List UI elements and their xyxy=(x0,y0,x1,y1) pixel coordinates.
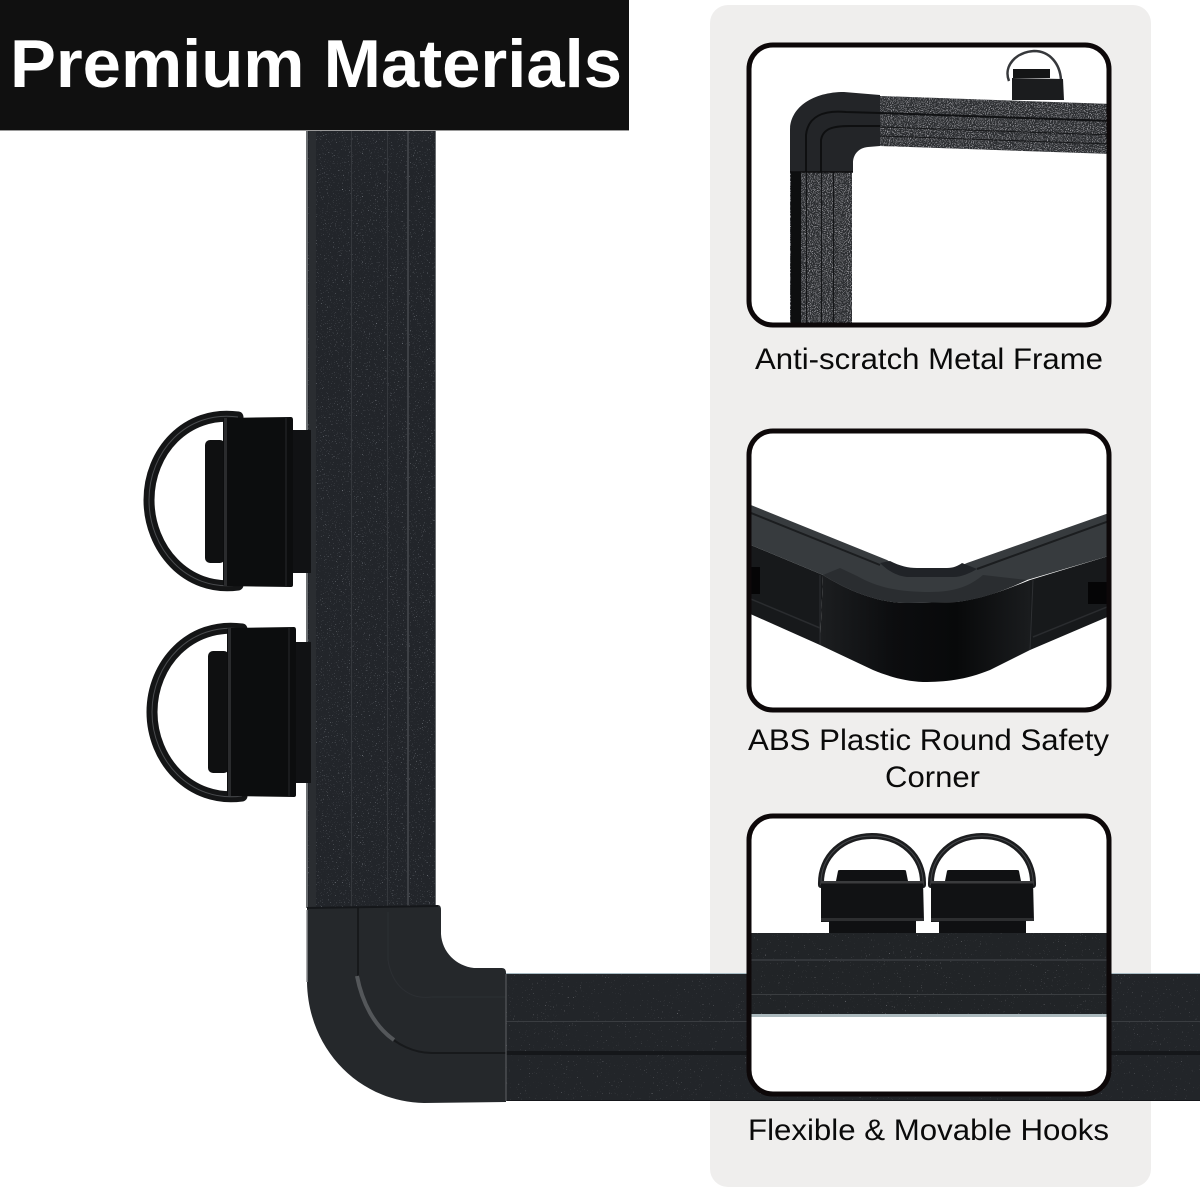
icon: small D-ring hook xyxy=(1008,51,1064,100)
icon: lower D-ring hook xyxy=(152,627,311,797)
thumbnail border xyxy=(749,816,1109,1094)
title banner: Premium Materials xyxy=(10,26,622,102)
thumbnail: flexible and movable hooks xyxy=(746,816,1114,1094)
icon: upper D-ring hook xyxy=(149,416,311,587)
caption: ABS plastic round safety corner: ABS Plastic Round Safety xyxy=(748,724,1109,757)
icon: right hook xyxy=(931,836,1034,934)
top face of frame xyxy=(746,503,1112,603)
thumbnail border xyxy=(749,431,1109,710)
caption: anti-scratch metal frame: Anti-scratch Metal Frame xyxy=(755,343,1103,376)
corner front xyxy=(820,575,1030,682)
main whiteboard frame photo xyxy=(149,130,1200,1103)
frame rail xyxy=(746,933,1114,1014)
frame: vertical rail xyxy=(306,130,436,908)
frame: horizontal rail xyxy=(505,973,1200,1101)
title banner xyxy=(0,0,629,131)
corner top face xyxy=(823,568,1027,603)
thumbnail: ABS plastic round safety corner xyxy=(746,431,1112,710)
inner lip xyxy=(880,561,977,577)
thumbnail: anti-scratch metal frame xyxy=(749,45,1112,328)
caption: flexible and movable hooks: Flexible & Movable Hooks xyxy=(748,1114,1109,1147)
caption: ABS plastic round safety corner: Corner xyxy=(885,761,980,794)
icon: left hook xyxy=(821,836,924,934)
frame: rounded plastic corner xyxy=(307,905,506,1103)
thumbnail border xyxy=(749,45,1109,325)
rail fronts xyxy=(746,543,823,645)
panel: gray sidebar background xyxy=(710,5,1151,1187)
